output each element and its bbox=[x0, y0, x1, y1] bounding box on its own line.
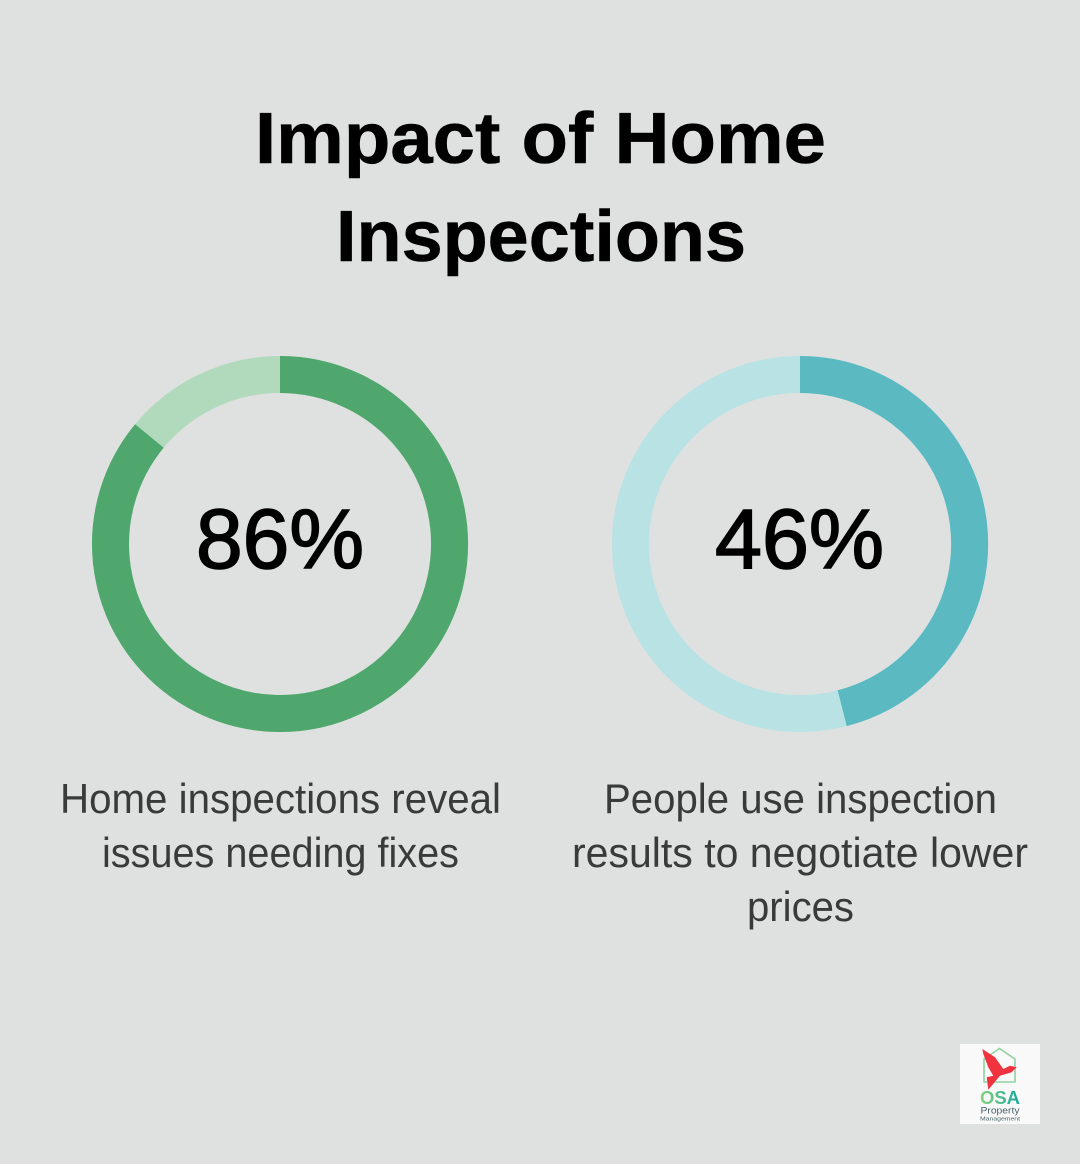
title bbox=[255, 99, 826, 277]
description: home inspections: Home inspections reveal bbox=[60, 775, 501, 822]
icon: red bird bbox=[982, 1049, 1017, 1090]
donut chart: 86% bbox=[110, 374, 450, 714]
value: 86%: 86% bbox=[196, 492, 364, 586]
icon: house outline bbox=[984, 1048, 1015, 1082]
panel: 86% stat bbox=[60, 374, 501, 876]
logo wordmark bbox=[980, 1088, 1021, 1122]
panel: 46% stat bbox=[572, 374, 1028, 930]
logo wordmark: Property bbox=[980, 1106, 1020, 1116]
description: negotiation bbox=[572, 775, 1028, 930]
description: home inspections: issues needing fixes bbox=[102, 829, 459, 876]
description: home inspections bbox=[60, 775, 501, 876]
title: Inspections bbox=[336, 197, 746, 277]
logo wordmark: OSA bbox=[980, 1088, 1020, 1108]
value: 46%: 46% bbox=[715, 492, 884, 586]
description: negotiation: results to negotiate lower bbox=[572, 829, 1028, 876]
logo: OSA Property Management bbox=[960, 1044, 1040, 1124]
logo wordmark: Management bbox=[980, 1116, 1021, 1122]
donut chart: 46% bbox=[630, 374, 970, 714]
title: Impact of Home bbox=[255, 99, 826, 179]
description: negotiation: prices bbox=[747, 883, 854, 930]
description: negotiation: People use inspection bbox=[604, 775, 997, 822]
